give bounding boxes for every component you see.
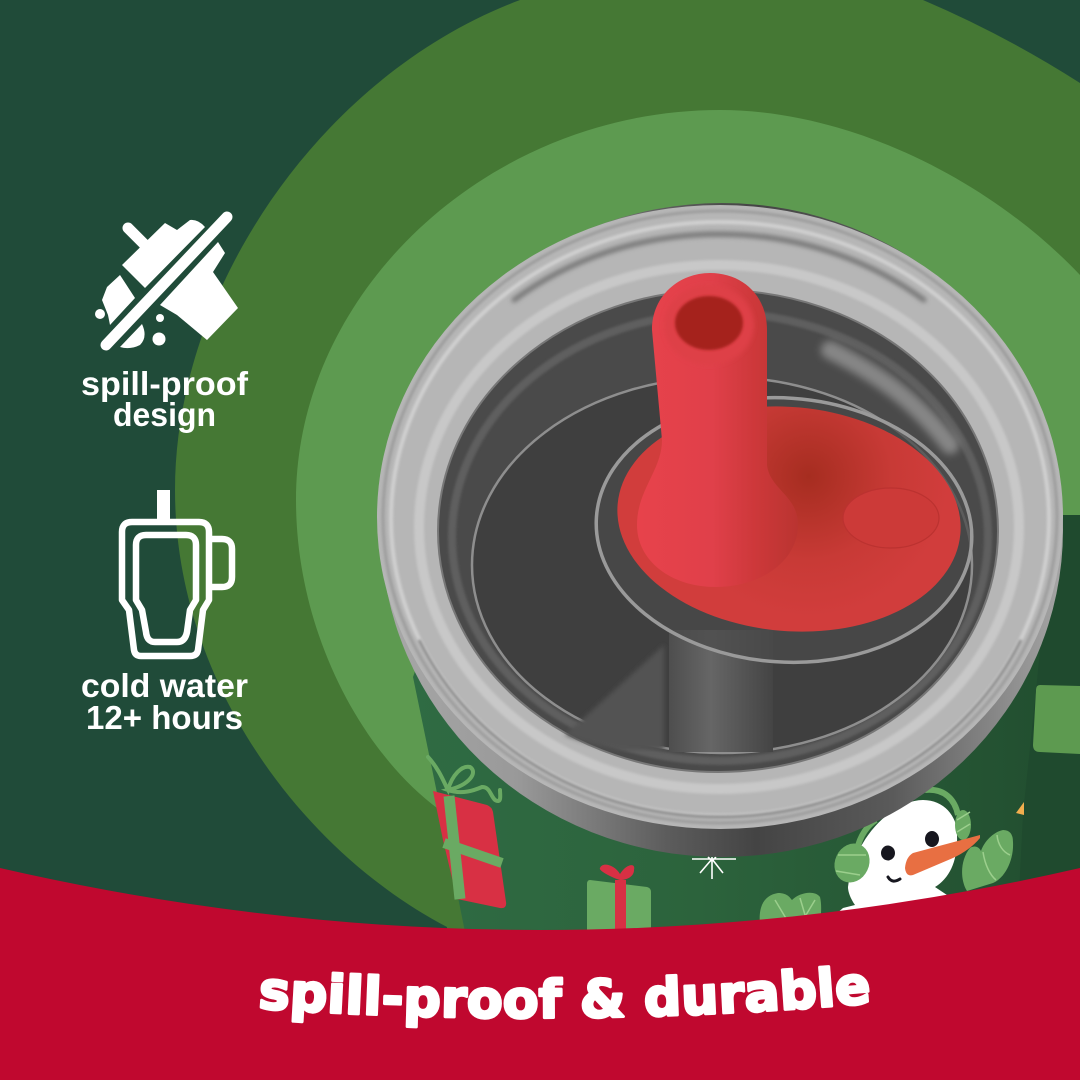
metal collar — [381, 203, 1063, 857]
banner heading: spill-proof & durable — [260, 965, 870, 1028]
icon: tumbler cold water — [122, 490, 232, 656]
straw — [637, 273, 798, 587]
label: cold water 12+ hours: cold water — [81, 667, 248, 704]
floor light wedge — [565, 645, 664, 750]
lid outer rim — [377, 205, 1063, 829]
label: spill-proof design: spill-proof — [81, 365, 249, 402]
label: spill-proof design — [81, 365, 249, 433]
snowman head and body — [835, 800, 957, 915]
clear ring around disc — [587, 385, 981, 675]
small orange detail — [1016, 802, 1024, 815]
snowman — [828, 790, 980, 915]
lid opening — [438, 290, 998, 772]
earmuff band — [857, 790, 958, 850]
tumbler floor — [472, 377, 972, 753]
straw hole — [675, 296, 743, 350]
label: spill-proof design: design — [113, 396, 216, 433]
lid bands — [383, 211, 1057, 823]
snowflake — [692, 857, 736, 879]
tumbler — [377, 203, 1080, 932]
carrot nose — [905, 835, 980, 875]
red silicone disc — [608, 392, 970, 646]
clear lid — [377, 205, 1063, 829]
small gift — [587, 865, 651, 932]
eye right — [925, 831, 939, 847]
inner green arc — [296, 110, 1080, 1000]
earmuff left — [828, 838, 876, 888]
red bottom banner — [0, 868, 1080, 1080]
tumbler handle — [1010, 515, 1080, 900]
straw tube and flared base — [637, 273, 798, 587]
handle light green panel — [1033, 685, 1080, 754]
straw rim — [664, 285, 754, 365]
right mitten — [962, 830, 1013, 891]
inner wall bands — [452, 313, 988, 761]
disc button — [843, 488, 939, 548]
earmuff right — [955, 810, 971, 840]
icon: spill-proof — [95, 217, 238, 348]
straw stem below lid — [669, 630, 773, 752]
eye left — [881, 846, 895, 860]
gift with ribbon — [428, 757, 506, 908]
label: cold water 12+ hours: 12+ hours — [86, 699, 243, 736]
label: cold water 12+ hours — [81, 667, 248, 736]
smile — [888, 877, 900, 881]
tumbler body wrap — [413, 600, 1045, 932]
lower mitten — [760, 893, 821, 925]
